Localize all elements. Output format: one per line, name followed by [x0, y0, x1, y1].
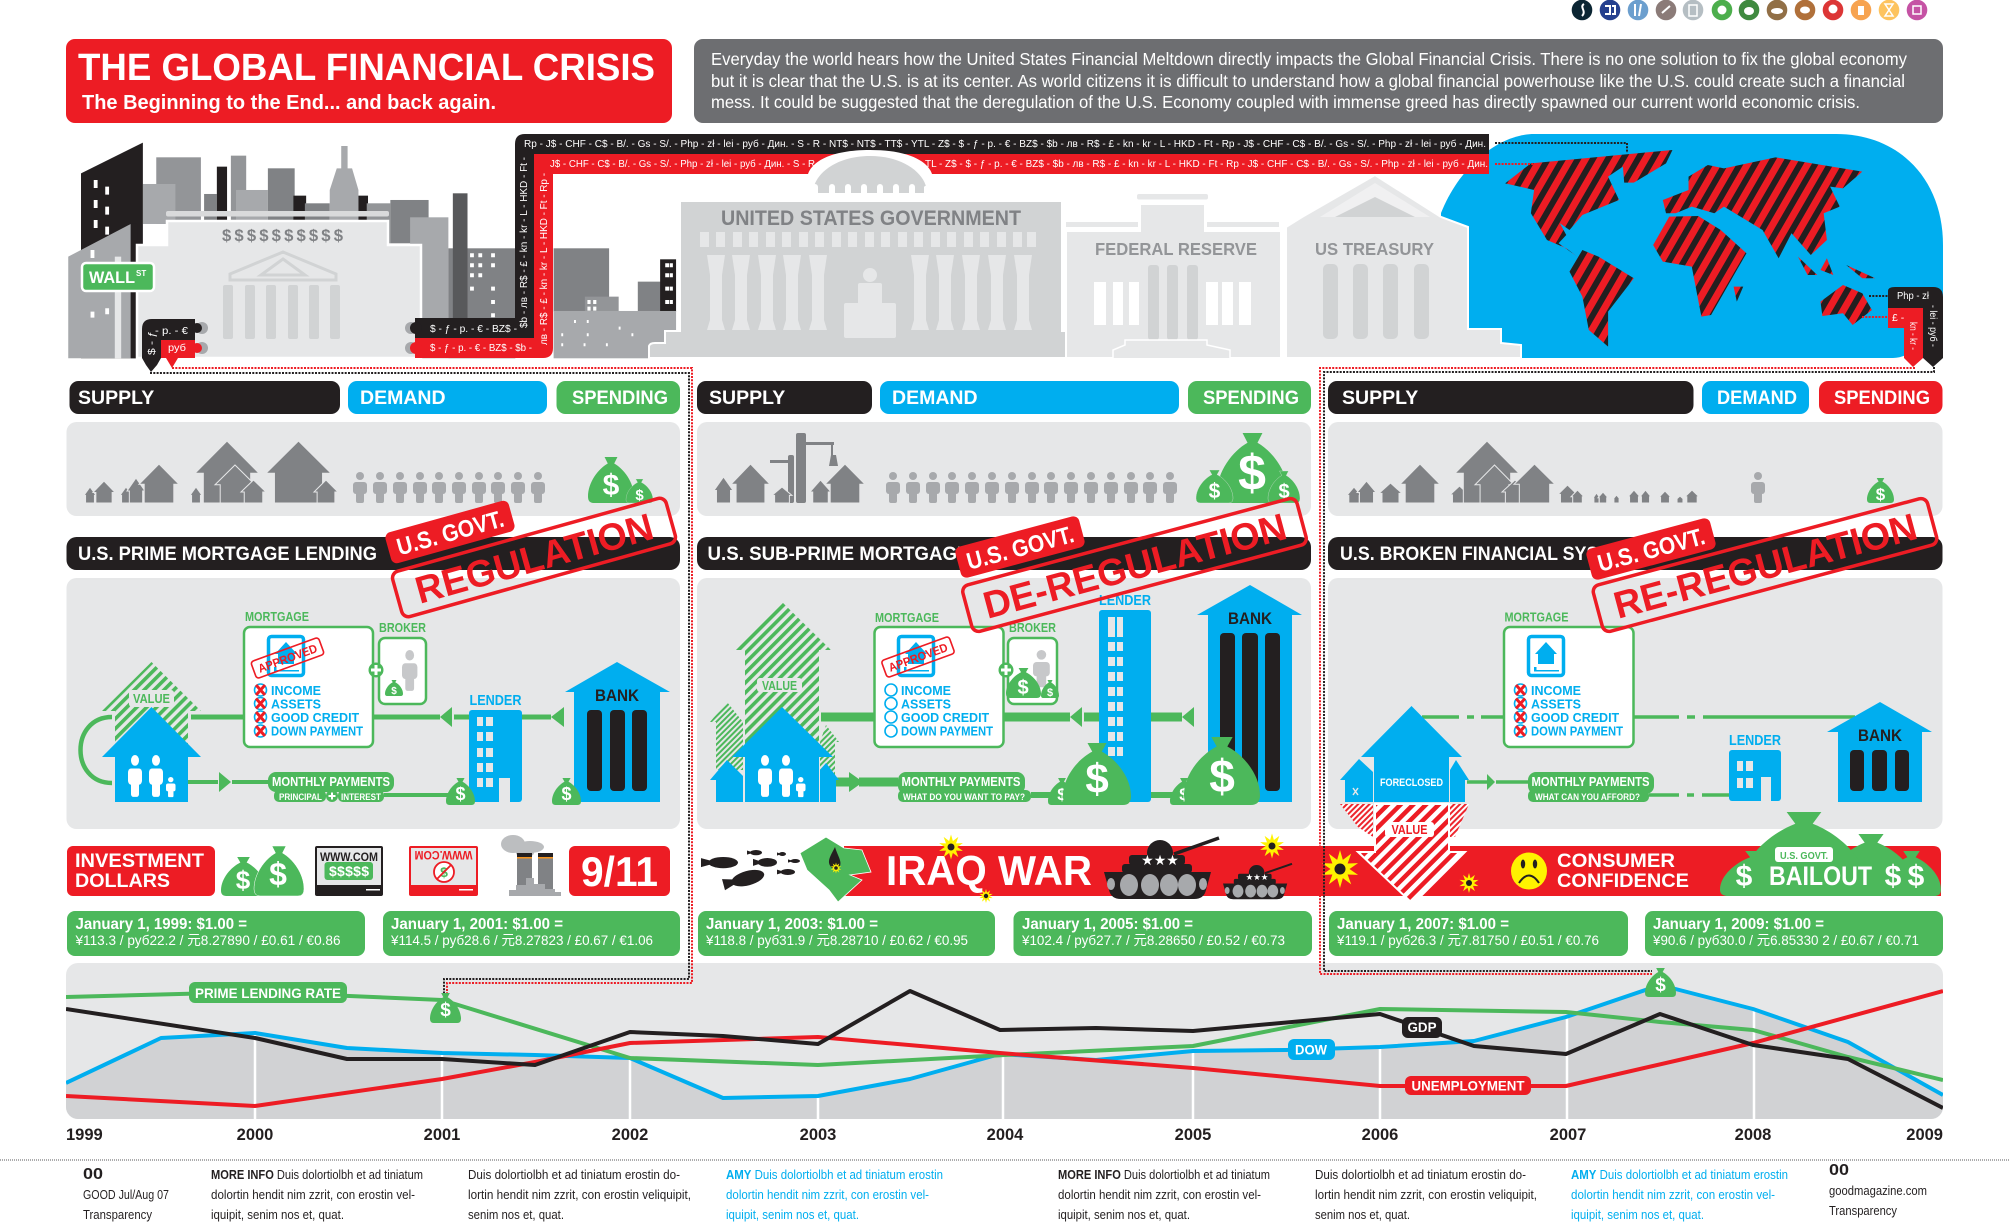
footer right folio: [1829, 1162, 1927, 1218]
footer left columns: dolortin hendit nim zzrit, con erostin vel-: [211, 1187, 415, 1202]
unemployment line: [66, 991, 1943, 1106]
exchange rate box 2005: [1014, 911, 1312, 956]
column 1 heading bar: U.S. PRIME MORTGAGE LENDING: [78, 543, 377, 565]
exchange rate box 2007: ¥119.1 / руб26.3 / 元7.81750 / £0.51 / €0.76: [1336, 932, 1599, 948]
monthly payments: MONTHLY PAYMENTS: [272, 775, 390, 789]
exchange rate box 2003: ¥118.8 / руб31.9 / 元8.28710 / £0.62 / €0.95: [705, 932, 968, 948]
mortgage box: ASSETS: [271, 698, 321, 712]
lender building: [469, 692, 522, 802]
footer left columns: [211, 1167, 943, 1222]
stamp: US govt regulation: REGULATION: [411, 506, 658, 613]
money bags: $: [1179, 785, 1189, 804]
column 2 supply and demand panel: $: [1278, 481, 1290, 503]
column 2 supply and demand panel: $: [1209, 480, 1221, 503]
mortgage box: [1504, 610, 1634, 747]
prime lending rate line: [66, 992, 1943, 1080]
bailout money bags: $: [1736, 860, 1753, 893]
footer left folio: GOOD Jul/Aug 07: [83, 1187, 169, 1202]
x axis years: 2009: [1906, 1126, 1943, 1144]
broker box: [368, 620, 427, 704]
bailout money bags: BAILOUT: [1769, 861, 1872, 891]
unemployment label: UNEMPLOYMENT: [1412, 1078, 1525, 1094]
footer right columns: iquipit, senim nos et, quat.: [1571, 1207, 1704, 1222]
column 2 header: supply demand spending: SPENDING: [1203, 387, 1299, 409]
Federal Reserve building: FEDERAL RESERVE: [1095, 239, 1257, 259]
world map globe panel: [1441, 134, 1943, 360]
column 3 lending flow panel: [1328, 578, 1942, 829]
left currency tag: [142, 319, 208, 372]
column 2 heading bar: [697, 537, 1311, 570]
line chart: [66, 963, 1943, 1119]
column 1 header: supply demand spending: SUPPLY: [78, 387, 154, 409]
lender tower: LENDER: [1099, 592, 1151, 609]
red currency pipeline: [415, 154, 1489, 358]
footer right folio: 00: [1829, 1162, 1849, 1179]
currency pipelines: $ - ƒ - p. - € - BZ$ - $b -: [430, 342, 532, 354]
bailout money bags: [1720, 812, 1941, 896]
exchange rate box 2005: ¥102.4 / руб27.7 / 元8.28650 / £0.52 / €0.73: [1021, 932, 1285, 948]
dow label: [1288, 1039, 1335, 1060]
footer left columns: iquipit, senim nos et, quat.: [726, 1207, 859, 1222]
broker box: [998, 620, 1059, 704]
family houses: [710, 707, 839, 802]
column 3 header: supply demand spending: SPENDING: [1834, 387, 1930, 409]
Wall St sign: [82, 263, 154, 291]
falling value striped arrows: [1340, 804, 1469, 904]
mortgage box: GOOD CREDIT: [271, 711, 360, 725]
red timeline band: [844, 846, 1941, 896]
chart money bag 2007: $: [1655, 975, 1666, 996]
column 2 supply and demand panel: [697, 422, 1311, 516]
mortgage box: DOWN PAYMENT: [901, 724, 993, 738]
foreclosed houses: [1340, 706, 1469, 802]
stamp: US govt de-regulation: U.S. GOVT.: [964, 521, 1077, 576]
mortgage box: INCOME: [901, 684, 951, 698]
chart money bag 2007: [1645, 968, 1676, 997]
exchange rate box 2001: [383, 911, 680, 956]
Iraq map: [800, 837, 871, 902]
mortgage box: DOWN PAYMENT: [271, 724, 363, 738]
footer right columns: dolortin hendit nim zzrit, con erostin vel-: [1571, 1187, 1775, 1202]
x axis years: 2008: [1735, 1126, 1771, 1144]
column 2 header: supply demand spending: SUPPLY: [709, 387, 785, 409]
monthly payments: INTEREST: [341, 792, 381, 803]
main title: THE GLOBAL FINANCIAL CRISIS: [78, 47, 655, 89]
consumer confidence label: CONFIDENCE: [1557, 870, 1689, 892]
money bags: [446, 778, 581, 805]
exchange rate box 1999: ¥113.3 / руб22.2 / 元8.27890 / £0.61 / €0.86: [75, 932, 341, 948]
Wall St sign: ST: [136, 269, 146, 278]
intro text panel: Everyday the world hears how the United States Financial Meltdown directly impacts the Global Financial Crisis. There is no one solution to fix the global economy: [711, 49, 1907, 69]
stamp: US govt re-regulation: RE-REGULATION: [1609, 506, 1922, 628]
exchange rate box 2009: ¥90.6 / руб30.0 / 元6.85330 2 / £0.67 / €0.71: [1652, 932, 1919, 948]
column 1 supply and demand panel: $: [603, 469, 620, 502]
column 3 header: supply demand spending: [1328, 381, 1942, 414]
monthly payments: [898, 772, 1031, 803]
column 2 header: supply demand spending: DEMAND: [892, 387, 978, 409]
mortgage box: [244, 609, 373, 747]
column 2 header: supply demand spending: [697, 381, 1311, 414]
flow lines and arrows: [821, 707, 1194, 795]
money bags: $: [455, 784, 466, 804]
x axis years: 2006: [1362, 1126, 1398, 1144]
column 3 header: supply demand spending: DEMAND: [1717, 387, 1797, 409]
x axis years: 1999: [66, 1126, 103, 1144]
investment money bags: $: [269, 856, 287, 892]
US Treasury building: [1286, 175, 1521, 358]
mortgage box: GOOD CREDIT: [1531, 711, 1620, 725]
Wall Street skyline: [68, 143, 676, 358]
column 3 heading bar: U.S. BROKEN FINANCIAL SYSTEM: [1340, 543, 1636, 565]
left currency tag: руб: [168, 342, 186, 354]
footer left columns: MORE INFO Duis dolortiolbh et ad tiniatum: [211, 1167, 423, 1182]
broker box: BROKER: [379, 620, 427, 635]
broker box: BROKER: [1009, 620, 1057, 635]
striped continents: [1505, 150, 1875, 347]
exchange rate box 1999: [67, 911, 365, 956]
mortgage box: MORTGAGE: [875, 610, 939, 625]
bank: [1197, 585, 1302, 802]
bombs: [701, 850, 800, 892]
monthly payments: PRINCIPAL: [279, 792, 322, 803]
mortgage box: DOWN PAYMENT: [1531, 724, 1623, 738]
broker box: $: [1017, 677, 1029, 699]
gdp line: [66, 991, 1943, 1108]
crane: [770, 433, 838, 503]
right currency tag: £ -: [1892, 312, 1905, 324]
dow label: DOW: [1295, 1042, 1328, 1058]
footer right columns: iquipit, senim nos et, quat.: [1058, 1207, 1190, 1222]
twin towers: [501, 835, 561, 896]
monthly payments: WHAT CAN YOU AFFORD?: [1535, 792, 1640, 803]
gdp label: GDP: [1408, 1019, 1436, 1035]
black currency pipeline: [415, 134, 1489, 338]
bailout money bags: U.S. GOVT.: [1780, 850, 1828, 862]
lender: [1729, 732, 1781, 801]
exchange rate box 2009: January 1, 2009: $1.00 =: [1653, 916, 1824, 933]
broken flow lines: [1422, 717, 1855, 795]
row of topic icons: [1572, 0, 1927, 20]
broker box: $: [391, 686, 397, 697]
busted dot-com computer: [409, 846, 478, 896]
Federal Reserve building: [1066, 194, 1281, 358]
tanks: ★★★: [1246, 873, 1269, 883]
inflated value houses: [710, 602, 839, 780]
column 2 lending flow panel: [697, 578, 1311, 829]
currency pipelines: J$ - CHF - C$ - B/. - Gs - S/. - Php - zł - lei - руб - Дин. - S - R: [550, 158, 815, 170]
bank: BANK: [1228, 609, 1273, 628]
dot-com computer: [315, 846, 383, 896]
money bags: $: [1209, 750, 1235, 802]
money bags: $: [1085, 755, 1109, 802]
dow line: [66, 985, 1943, 1098]
tanks: ★★★: [1141, 853, 1179, 869]
mortgage box: GOOD CREDIT: [901, 711, 990, 725]
bank: [1827, 702, 1932, 802]
column 1 supply and demand panel: $: [635, 487, 644, 504]
US government building: [649, 201, 1090, 358]
right currency tag: - lei - руб -: [1927, 305, 1939, 347]
right currency tag: [1888, 287, 1943, 367]
footer rule: [0, 1159, 2009, 1161]
mortgage box: INCOME: [1531, 684, 1581, 698]
Wall Street bank building: [137, 211, 421, 358]
explosions: [939, 834, 1478, 903]
footer left folio: [83, 1166, 169, 1222]
bailout money bags: $: [1885, 860, 1902, 893]
exchange rate box 2003: January 1, 2003: $1.00 =: [706, 916, 878, 933]
bailout money bags: $: [1908, 860, 1925, 893]
busted dot-com computer: $: [440, 864, 448, 880]
sad face: [1511, 852, 1547, 890]
money bags: [1048, 737, 1260, 805]
x axis years: 2002: [612, 1126, 648, 1144]
monthly payments: WHAT DO YOU WANT TO PAY?: [903, 792, 1025, 803]
value house: VALUE: [133, 691, 170, 706]
family house: [102, 707, 201, 802]
exchange rate box 2007: [1329, 911, 1628, 956]
busted dot-com computer: WWW.COM: [414, 848, 472, 862]
bank: BANK: [1858, 726, 1903, 745]
footer left columns: AMY Duis dolortiolbh et ad tiniatum erostin: [726, 1167, 943, 1182]
footer left columns: dolortin hendit nim zzrit, con erostin vel-: [726, 1187, 929, 1202]
footer left columns: iquipit, senim nos et, quat.: [211, 1207, 344, 1222]
x axis years: 2000: [237, 1126, 273, 1144]
mortgage box: INCOME: [271, 684, 321, 698]
exchange rate box 2001: ¥114.5 / руб28.6 / 元8.27823 / £0.67 / €1.06: [390, 932, 653, 948]
column 3 supply and demand panel: $: [1876, 485, 1886, 504]
footer right columns: senim nos et, quat.: [1315, 1207, 1410, 1222]
chart money bag 2001: $: [440, 1000, 451, 1021]
x axis years: 2005: [1175, 1126, 1211, 1144]
dot-com computer: WWW.COM: [320, 850, 378, 864]
footer right columns: MORE INFO Duis dolortiolbh et ad tiniatum: [1058, 1167, 1270, 1182]
footer right folio: Transparency: [1829, 1203, 1897, 1218]
Wall Street bank building: $$$$$$$$$$: [222, 226, 344, 245]
tanks: [1104, 838, 1292, 899]
flow lines and arrows: [80, 707, 564, 795]
footer left folio: Transparency: [83, 1207, 152, 1222]
monthly payments: [268, 772, 394, 803]
bank: BANK: [595, 686, 640, 705]
column 1 header: supply demand spending: [70, 381, 680, 414]
lender: LENDER: [1729, 732, 1781, 749]
column 3 header: supply demand spending: SUPPLY: [1342, 387, 1418, 409]
consumer confidence label: CONSUMER: [1557, 850, 1675, 872]
subtitle: The Beginning to the End... and back again.: [82, 91, 496, 114]
currency pipelines: [405, 134, 1489, 358]
stamp: US govt regulation: U.S. GOVT.: [394, 506, 507, 561]
footer right columns: AMY Duis dolortiolbh et ad tiniatum erostin: [1571, 1167, 1788, 1182]
column 1 supply and demand panel: [66, 422, 680, 516]
x axis years: 2007: [1550, 1126, 1586, 1144]
footer left columns: senim nos et, quat.: [468, 1207, 564, 1222]
column 2 supply and demand panel: $: [1238, 445, 1266, 501]
foreclosed houses: FORECLOSED: [1380, 777, 1443, 789]
US government building: UNITED STATES GOVERNMENT: [721, 206, 1021, 230]
gdp label: [1402, 1017, 1442, 1038]
intro text panel: mess. It could be suggested that the deregulation of the U.S. Economy coupled with immense greed has directly spawned our current world economic crisis.: [711, 92, 1860, 112]
footer right columns: dolortin hendit nim zzrit, con erostin vel-: [1058, 1187, 1261, 1202]
stamp: US govt de-regulation: DE-REGULATION: [979, 506, 1291, 628]
US Treasury building: US TREASURY: [1315, 239, 1434, 259]
investment dollars label: INVESTMENT: [75, 850, 204, 872]
falling value striped arrows: VALUE: [1392, 823, 1428, 837]
investment dollars label: [67, 846, 215, 896]
x axis years: 2003: [800, 1126, 836, 1144]
inflated value houses: VALUE: [762, 678, 797, 693]
Iraq war title: IRAQ WAR: [886, 847, 1092, 894]
currency pipelines: TL - Z$ - $ - ƒ - p. - € - BZ$ - $b - лв - R$ - £ - kn - kr - L - HKD - Ft - Rp - J$ - CHF - C$ - B/. - Gs - S/. - Php - zł - lei - руб - Дин.: [925, 158, 1488, 170]
stamp: US govt re-regulation: U.S. GOVT.: [1595, 523, 1708, 578]
column 3 heading bar: [1328, 537, 1942, 570]
right currency tag: Php - zł: [1897, 290, 1930, 302]
footer right columns: lortin hendit nim zzrit, con erostin veliquipit,: [1315, 1187, 1537, 1202]
mortgage box: MORTGAGE: [245, 609, 309, 624]
exchange rate box 2005: January 1, 2005: $1.00 =: [1022, 916, 1193, 933]
exchange rate box 2009: [1645, 911, 1943, 956]
lender tower: [1099, 592, 1151, 802]
currency pipelines: лв - R$ - £ - kn - kr - L - HKD - Ft - Rp -: [538, 173, 550, 345]
column 2 heading bar: U.S. SUB-PRIME MORTGAGE: [708, 543, 970, 565]
money bags: $: [561, 784, 572, 804]
footer right columns: [1058, 1167, 1788, 1222]
column 1 header: supply demand spending: SPENDING: [572, 387, 668, 409]
dotted link lines: [151, 143, 1934, 993]
intro text panel: [694, 39, 1943, 123]
intro text panel: but it is clear that the U.S. is at its center. As world citizens it is difficult to understand how a global financial powerhouse like the U.S. could create such a financial: [711, 71, 1905, 91]
mortgage box: ASSETS: [1531, 698, 1581, 712]
exchange rate box 1999: January 1, 1999: $1.00 =: [76, 916, 247, 933]
value house: [102, 662, 201, 775]
x axis years: 2001: [424, 1126, 460, 1144]
investment money bags: $: [236, 865, 251, 895]
investment money bags: [221, 846, 304, 896]
lender building: LENDER: [470, 692, 522, 709]
currency pipelines: $ - ƒ - p. - € - BZ$ -: [430, 323, 517, 335]
left currency tag: $ - ƒ: [146, 331, 158, 355]
money bags: $: [1057, 785, 1067, 804]
currency pipelines: $b - лв - R$ - £ - kn - kr - L - HKD - Ft -: [518, 157, 530, 328]
monthly payments: MONTHLY PAYMENTS: [1532, 775, 1650, 789]
mortgage box: ASSETS: [901, 698, 951, 712]
government dome: [808, 150, 932, 193]
prime lending rate label: PRIME LENDING RATE: [195, 985, 341, 1001]
x axis years: [66, 1126, 1943, 1144]
monthly payments: MONTHLY PAYMENTS: [902, 775, 1020, 789]
mortgage box: MORTGAGE: [1504, 610, 1569, 624]
column 1 header: supply demand spending: DEMAND: [360, 387, 446, 409]
left currency tag: - p. - €: [155, 325, 188, 337]
column 1 lending flow panel: [66, 578, 680, 829]
consumer confidence label: [1557, 850, 1689, 892]
footer right folio: goodmagazine.com: [1829, 1183, 1927, 1198]
monthly payments: [1528, 772, 1654, 803]
x axis years: 2004: [987, 1126, 1024, 1144]
footer left folio: 00: [83, 1166, 103, 1183]
chart money bag 2001: [430, 993, 461, 1023]
title block: [66, 39, 672, 123]
footer right columns: Duis dolortiolbh et ad tiniatum erostin do-: [1315, 1167, 1526, 1182]
right currency tag: kn - kr -: [1907, 322, 1919, 350]
exchange rate box 2001: January 1, 2001: $1.00 =: [391, 916, 563, 933]
exchange rate box 2007: January 1, 2007: $1.00 =: [1337, 916, 1509, 933]
bank: [565, 662, 670, 802]
Wall St sign: WALL: [89, 268, 135, 287]
exchange rate box 2003: [698, 911, 995, 956]
dot-com computer: $$$$$: [329, 863, 369, 879]
column 1 heading bar: [66, 537, 680, 570]
footer left columns: lortin hendit nim zzrit, con erostin veliquipit,: [468, 1187, 691, 1202]
investment dollars label: DOLLARS: [75, 870, 170, 892]
broker box: $: [1047, 687, 1053, 699]
column 3 supply and demand panel: [1328, 422, 1942, 516]
9/11 label: 9/11: [581, 848, 658, 895]
currency pipelines: Rp - J$ - CHF - C$ - B/. - Gs - S/. - Php - zł - lei - руб - Дин. - S - R - NT$ - NT$ - TT$ - YTL - Z$ - $ - ƒ - p. - € - BZ$ - $b - лв - R$ - £ - kn - kr - L - HKD - Ft - Rp - J$ - CHF - C$ - B/. - Gs - S/. - Php - zł - lei - руб - Дин.: [524, 138, 1486, 150]
mortgage box: [874, 610, 1004, 747]
footer left columns: Duis dolortiolbh et ad tiniatum erostin do-: [468, 1167, 680, 1182]
